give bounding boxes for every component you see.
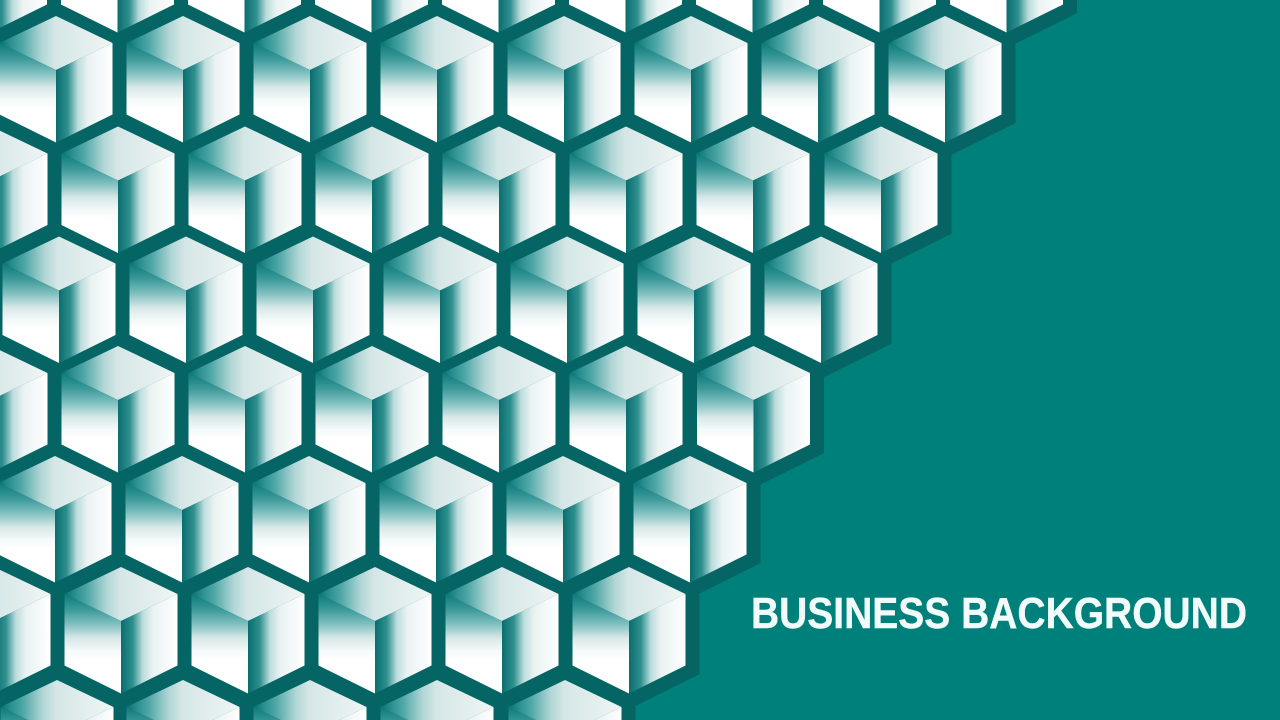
cube row 3 [0, 126, 938, 253]
cube row 7 [0, 567, 686, 694]
cube row 4 [0, 236, 878, 363]
cube row 5 [0, 346, 810, 472]
cube row 8 [0, 680, 622, 720]
cube row 2 [0, 16, 1002, 142]
cube row 6 [0, 456, 746, 582]
cube row 1 [0, 0, 1063, 32]
